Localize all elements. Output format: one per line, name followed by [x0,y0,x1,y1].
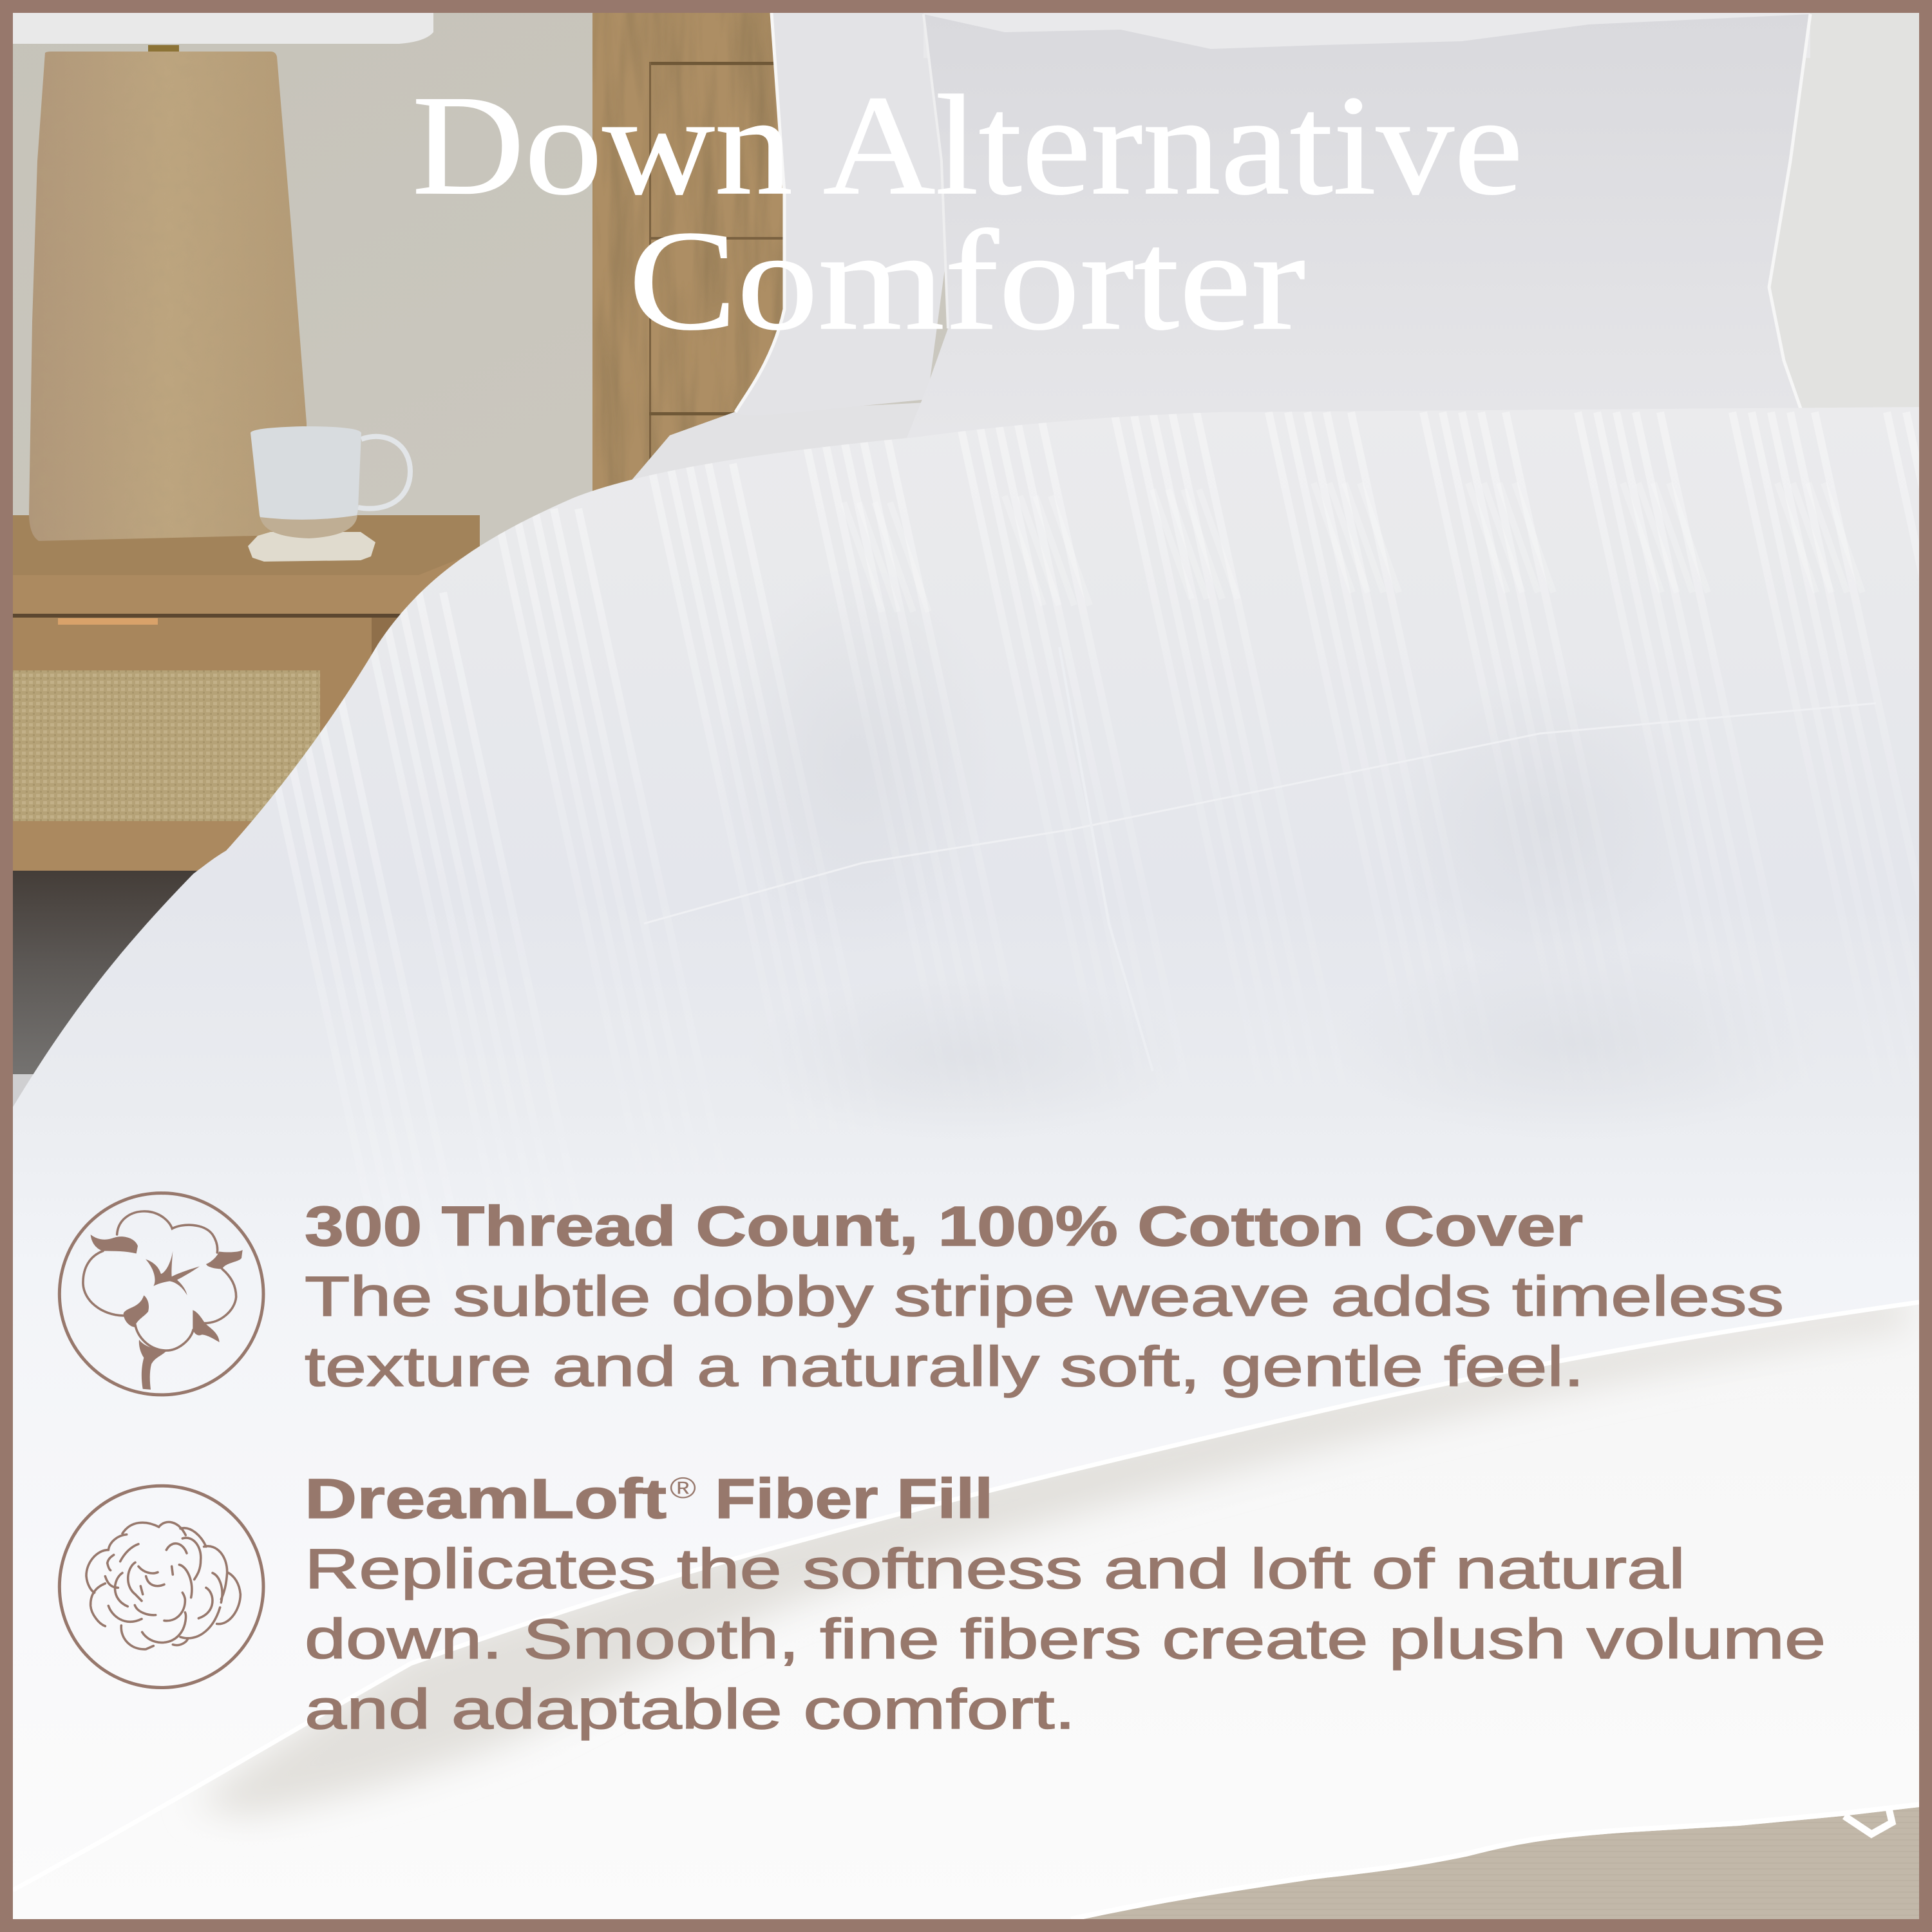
comforter [13,407,1919,1890]
right wall [1739,0,1932,451]
feature text: cotton cover [305,1195,1784,1398]
title [412,66,1523,360]
feature body: fiber fill: and adaptable comfort. [305,1678,1075,1741]
feature body: cotton cover: The subtle dobby stripe weave adds timeless [305,1265,1784,1328]
pale floor patch [13,1074,90,1132]
feature body: cotton cover: texture and a naturally soft, gentle feel. [305,1336,1584,1398]
nightstand [13,515,480,871]
dark floor under nightstand [13,871,270,1077]
feature heading: fiber fill [305,1468,993,1530]
back pillow [735,13,979,415]
feature heading: cotton cover: 300 Thread Count, 100% Cotton Cover [305,1195,1583,1258]
icon: fiber fill puff in circle [59,1486,263,1688]
rear pillows at top [923,13,1810,58]
title line 1: Down Alternative [412,66,1523,225]
feature body: fiber fill: Replicates the softness and loft of natural [305,1538,1685,1600]
rattan drawer panel [13,670,320,821]
headboard [592,13,792,502]
feature heading: fiber fill: Fiber Fill [715,1468,993,1530]
icon: cotton boll in circle [59,1193,263,1395]
mug on coaster [248,426,410,562]
wooden floor [1071,1807,1919,1922]
feature heading: fiber fill: ® [670,1471,696,1504]
feature body: fiber fill: down. Smooth, fine fibers create plush volume [305,1608,1826,1671]
skirt hem stitching [1071,1804,1919,1919]
bed skirt lower layer [13,1288,1919,1919]
feature heading: fiber fill: DreamLoft [305,1468,667,1530]
corner loop tag [1844,1806,1892,1834]
comforter hem highlight [13,1302,1919,1890]
comforter dobby stripes, folds and seams [275,482,1875,1070]
shadow under comforter edge [193,1294,1906,1816]
fitted sheet [618,402,966,502]
title line 2: Comforter [629,202,1305,360]
lamp: shade and ceramic base [13,13,433,541]
feature body: cotton cover [305,1265,1784,1398]
feature text: fiber fill [305,1468,1826,1741]
main pillow [907,14,1810,438]
wall [0,0,1932,902]
feature body: fiber fill [305,1538,1826,1741]
